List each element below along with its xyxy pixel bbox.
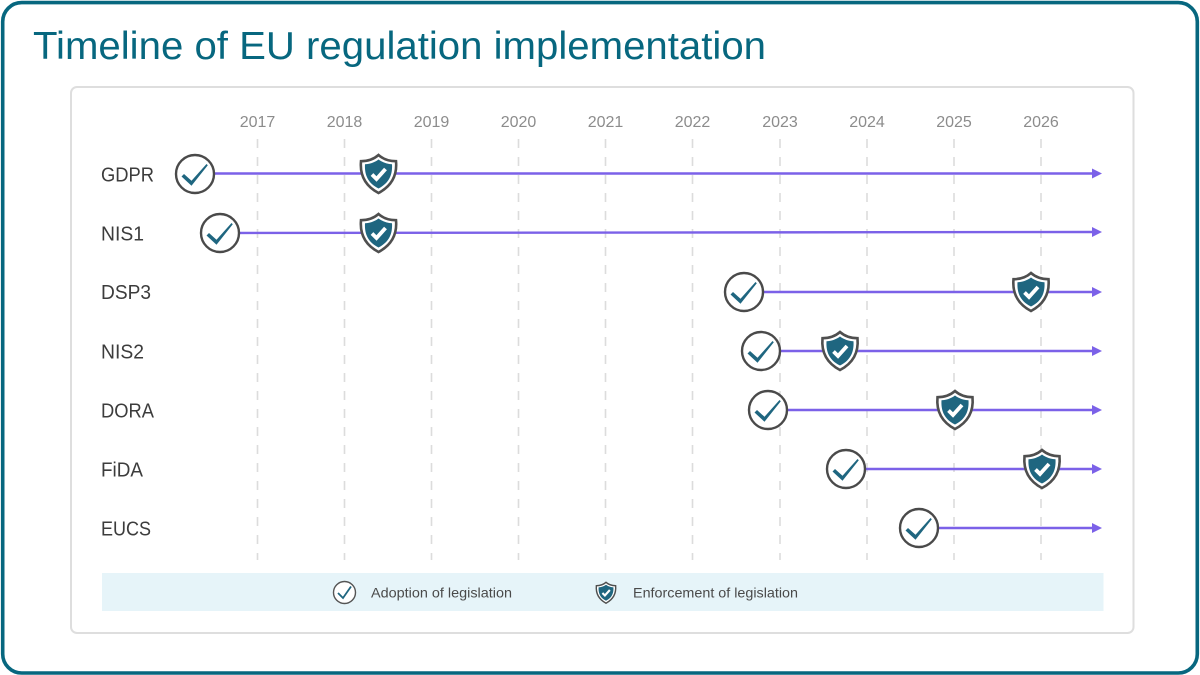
year axis labels — [240, 114, 1059, 131]
year axis labels: 2021 — [588, 114, 623, 131]
legend — [102, 573, 1104, 611]
timeline arrows — [195, 168, 1102, 533]
adoption markers — [176, 155, 938, 547]
year axis labels: 2019 — [414, 114, 449, 131]
legend icon: adoption — [334, 582, 356, 604]
legend text: adoption: Adoption of legislation — [371, 584, 512, 600]
panel: timeline chart — [71, 87, 1134, 633]
year axis labels: 2018 — [327, 114, 362, 131]
year axis labels: 2020 — [501, 114, 536, 131]
legend text: enforcement: Enforcement of legislation — [633, 584, 798, 600]
year axis labels: 2022 — [675, 114, 710, 131]
regulation labels: EUCS — [101, 518, 151, 540]
year axis labels: 2017 — [240, 114, 275, 131]
title: Timeline of EU regulation implementation — [33, 25, 766, 68]
year axis labels: 2026 — [1023, 114, 1059, 131]
year axis labels: 2023 — [762, 114, 798, 131]
regulation labels: NIS2 — [101, 340, 144, 364]
enforcement markers — [361, 155, 1060, 488]
year axis labels: 2025 — [936, 114, 972, 131]
regulation labels: NIS1 — [101, 222, 144, 246]
regulation labels: DSP3 — [101, 281, 151, 304]
regulation labels — [101, 164, 154, 540]
regulation labels: FiDA — [101, 458, 143, 482]
legend icon: enforcement — [596, 582, 616, 603]
regulation labels: GDPR — [101, 164, 154, 186]
regulation labels: DORA — [101, 400, 154, 422]
year axis labels: 2024 — [849, 114, 885, 131]
